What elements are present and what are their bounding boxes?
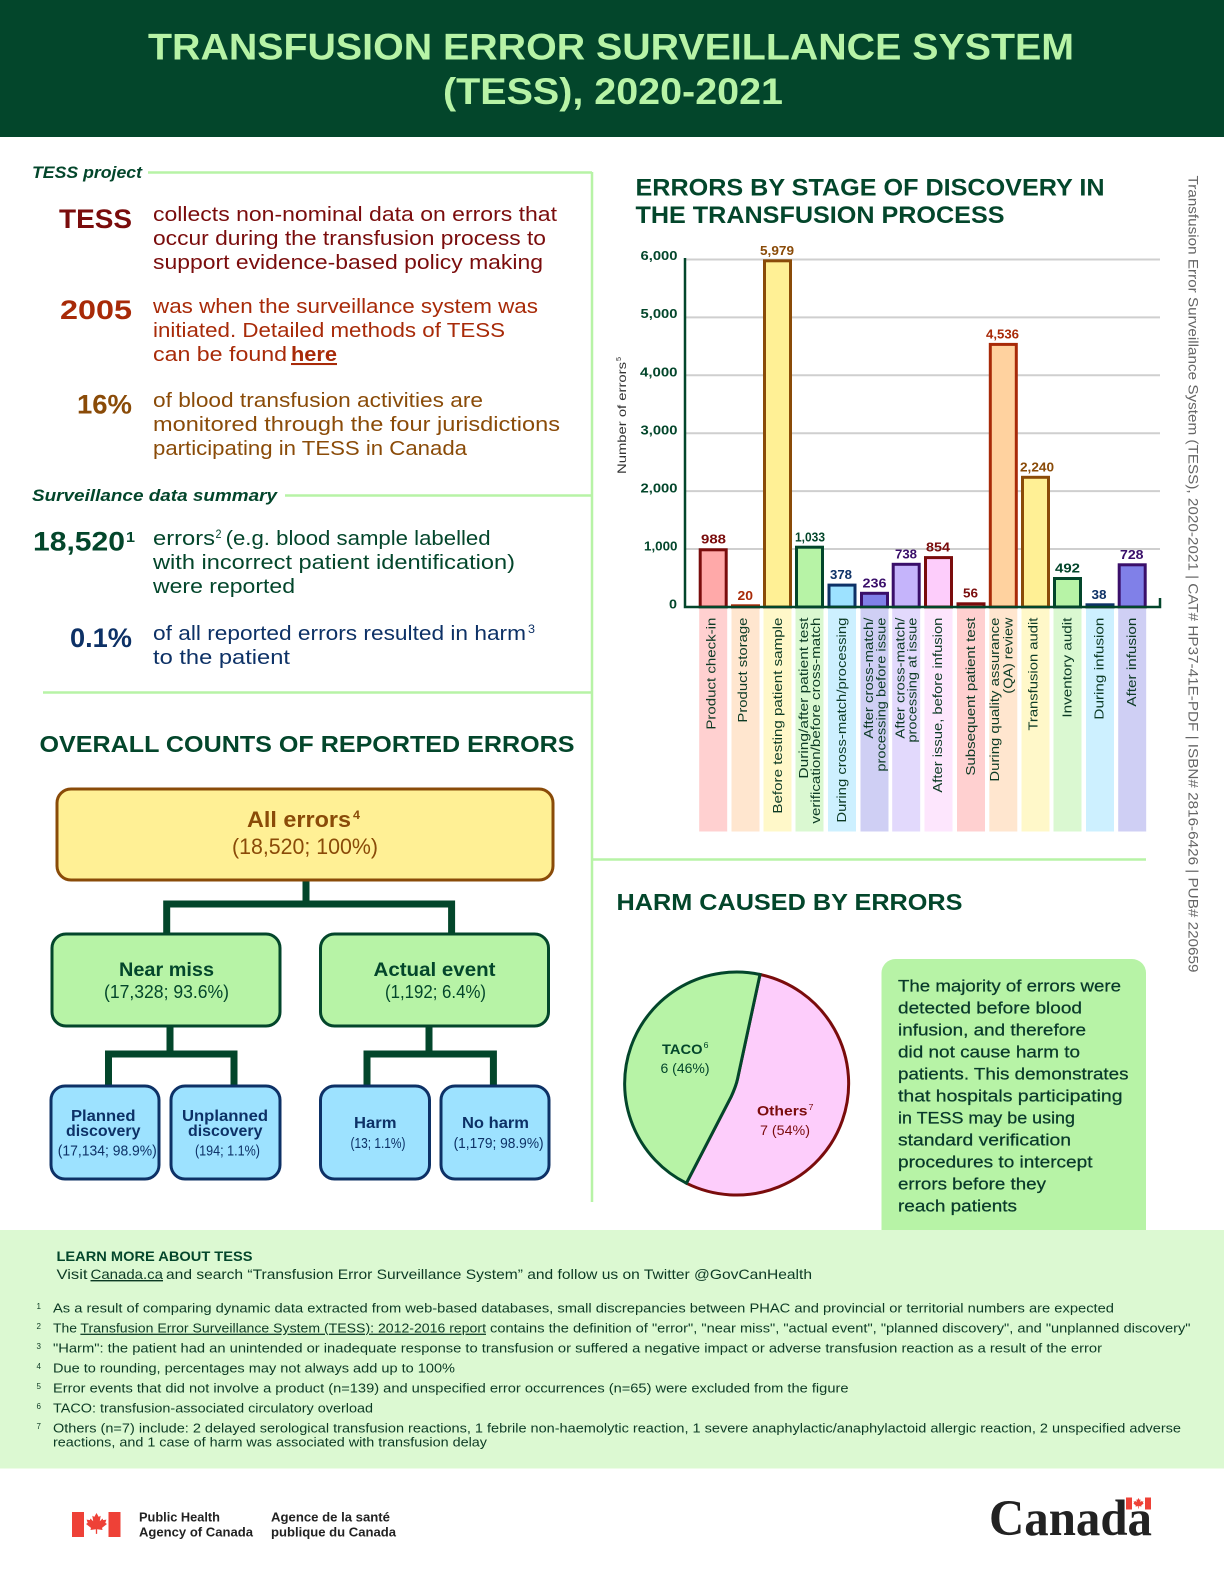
fact: 18,520 errors: (e.g. blood sample labelled: [226, 527, 491, 550]
fact: 18,520 errors: errors: [153, 527, 215, 550]
callout: majority of errors: errors before they: [898, 1174, 1047, 1194]
box: all errors: All errors: [247, 807, 351, 832]
fact: 2005: can be found: [153, 343, 287, 366]
fact: 0.1% harm: of all reported errors resulted in harm: [153, 622, 526, 645]
panel: overall counts of reported errors: [40, 731, 574, 1179]
box: planned discovery: [51, 1086, 159, 1179]
panel: errors by stage chart: [615, 174, 1160, 832]
fact: 2005: 2005: [60, 295, 132, 325]
logo: Public Health Agency of Canada: Agence de la santé: [271, 1510, 390, 1524]
callout: majority of errors: that hospitals participating: [898, 1086, 1122, 1106]
fact: 18,520 errors: 2: [216, 527, 222, 541]
box: all errors: [57, 789, 553, 880]
bar value labels: 2,240: [1020, 460, 1054, 474]
bar value labels: 854: [926, 540, 950, 554]
footnotes: 3: [36, 1342, 42, 1351]
bar value labels: 728: [1120, 548, 1144, 562]
heading: errors by stage: ERRORS BY STAGE OF DISCOVERY IN: [636, 174, 1104, 202]
bar value labels: 236: [862, 576, 887, 590]
callout: majority of errors: in TESS may be using: [898, 1108, 1075, 1128]
category labels: Before testing patient sample: [771, 618, 785, 814]
pie label: others: 7: [808, 1103, 814, 1112]
footnotes: As a result of comparing dynamic data extracted from web-based databases, small discrepancies between PHAC and provincial or territorial numbers are expected: [53, 1302, 1114, 1316]
axis title: Number of errors: [615, 362, 629, 474]
footnotes: TACO: transfusion-associated circulatory overload: [53, 1402, 373, 1416]
bar value labels: 738: [895, 548, 917, 562]
publication identifiers (vertical): Transfusion Error Surveillance System (TESS), 2020-2021 | CAT# HP37-41E-PDF | ISBN# 2816-6426 | PUB# 220659: [1186, 176, 1202, 973]
logo: Canada wordmark: Canada: [989, 1491, 1152, 1547]
box: no harm: [441, 1086, 549, 1179]
category labels: Transfusion audit: [1027, 617, 1041, 731]
learn more: LEARN MORE ABOUT TESS: [56, 1249, 252, 1264]
title banner: (TESS), 2020-2021: [443, 71, 783, 112]
category labels: During quality assurance: [988, 618, 1002, 782]
box: planned discovery: Planned: [71, 1108, 136, 1125]
footnotes: 1: [36, 1302, 42, 1311]
box: near miss: (17,328; 93.6%): [104, 982, 229, 1002]
box: actual event: (1,192; 6.4%): [385, 982, 486, 1002]
pie label: others: 7 (54%): [760, 1122, 810, 1138]
fact: TESS: [59, 203, 557, 274]
bar value labels: [701, 244, 1144, 603]
fact: 18,520 errors: 1: [126, 529, 135, 546]
box: harm: Harm: [354, 1115, 396, 1132]
footnotes: 2: [36, 1322, 42, 1331]
fact: 0.1% harm: to the patient: [153, 646, 290, 669]
box: all errors: (18,520; 100%): [232, 834, 378, 859]
footnotes: Error events that did not involve a product (n=139) and unspecified error occurrences (n=65) were excluded from the figure: [53, 1382, 849, 1396]
callout: majority of errors: did not cause harm to: [898, 1042, 1080, 1062]
box: unplanned discovery: (194; 1.1%): [195, 1144, 260, 1160]
fact: TESS: occur during the transfusion process to: [153, 227, 546, 250]
category labels: verification/before cross-match: [809, 618, 823, 824]
panel: harm caused by errors: [616, 889, 1146, 1232]
heading: errors by stage: THE TRANSFUSION PROCESS: [636, 202, 1004, 229]
fact: TESS: collects non-nominal data on errors that: [153, 203, 557, 226]
heading: harm caused: HARM CAUSED BY ERRORS: [616, 889, 962, 915]
box: harm: (13; 1.1%): [350, 1136, 406, 1152]
box: unplanned discovery: Unplanned: [182, 1108, 268, 1125]
bar value labels: 38: [1092, 588, 1107, 602]
title banner: TRANSFUSION ERROR SURVEILLANCE SYSTEM: [148, 26, 1074, 68]
category labels: After issue, before infusion: [931, 618, 945, 793]
logo: Public Health Agency of Canada: Agency of Canada: [139, 1526, 254, 1540]
fact: 2005: here: [291, 343, 337, 366]
y axis tick labels: [640, 249, 678, 612]
box: unplanned discovery: [171, 1086, 280, 1179]
y axis tick labels: 2,000: [640, 482, 678, 496]
footnotes: "Harm": the patient had an unintended or inadequate response to transfusion or suffered a negative impact or adverse transfusion reaction as a result of the error: [53, 1342, 1102, 1356]
fact: 2005: initiated. Detailed methods of TESS: [153, 319, 505, 342]
heading: TESS project: TESS project: [32, 163, 143, 182]
footnotes: The: [53, 1322, 77, 1336]
title banner: [0, 0, 1224, 137]
pie label: TACO: [660, 1041, 710, 1076]
footnotes: 7: [36, 1422, 42, 1431]
fact: 0.1% harm: [70, 622, 535, 669]
category labels: During infusion: [1092, 618, 1106, 720]
fact: 2005: was when the surveillance system was: [152, 295, 538, 318]
logo: Public Health Agency of Canada: [72, 1510, 397, 1540]
icon: wordmark flag: [1126, 1498, 1151, 1510]
fact: TESS: support evidence-based policy making: [153, 251, 543, 274]
callout: majority of errors: reach patients: [898, 1196, 1017, 1216]
pie slice: others: [686, 974, 849, 1195]
box: actual event: Actual event: [374, 960, 496, 981]
bar value labels: 1,033: [795, 530, 825, 544]
callout: majority of errors: [882, 959, 1146, 1232]
logo: Public Health Agency of Canada: publique du Canada: [271, 1526, 397, 1540]
y axis tick labels: 6,000: [640, 249, 678, 263]
category labels: Subsequent patient test: [964, 617, 978, 776]
fact: 16%: participating in TESS in Canada: [153, 437, 468, 460]
footnotes: reactions, and 1 case of harm was associated with transfusion delay: [53, 1436, 488, 1450]
box: planned discovery: discovery: [66, 1123, 141, 1140]
pie label: TACO: 6 (46%): [660, 1060, 710, 1076]
box: all errors: 4: [353, 808, 360, 822]
bar value labels: 4,536: [986, 328, 1019, 342]
footnotes: [36, 1302, 1190, 1450]
box: unplanned discovery: discovery: [188, 1123, 263, 1140]
fact: 16%: of blood transfusion activities are: [153, 389, 483, 412]
callout: majority of errors: standard verification: [898, 1130, 1071, 1150]
fact: 16%: monitored through the four jurisdictions: [153, 413, 560, 436]
box: planned discovery: (17,134; 98.9%): [58, 1144, 157, 1160]
fact: 2005: [60, 295, 538, 366]
footnotes: Others (n=7) include: 2 delayed serological transfusion reactions, 1 febrile non-haemolytic reaction, 1 severe anaphylactic/anaphylactoid allergic reaction, 2 unspecified adverse: [53, 1422, 1181, 1436]
callout: majority of errors: patients. This demonstrates: [898, 1064, 1128, 1084]
category labels: [704, 616, 1139, 824]
box: harm: [320, 1086, 430, 1179]
category labels: During/after patient test: [797, 617, 811, 779]
y axis tick labels: 5,000: [640, 307, 678, 321]
panel: surveillance data summary: [32, 486, 535, 669]
y axis tick labels: 0: [669, 598, 677, 612]
callout: majority of errors: procedures to intercept: [898, 1152, 1093, 1172]
learn more: and search “Transfusion Error Surveillance System” and follow us on Twitter @GovCanHealth: [166, 1266, 812, 1282]
bar value labels: 492: [1055, 562, 1080, 576]
category labels: After cross-match/: [893, 617, 907, 739]
category labels: Product storage: [736, 618, 750, 723]
footnotes: 4: [36, 1362, 42, 1371]
category labels: After cross-match/: [862, 617, 876, 739]
fact: 16%: 16%: [77, 390, 132, 420]
category labels: During cross-match/processing: [835, 618, 849, 823]
heading: errors by stage: [636, 174, 1104, 229]
heading: overall counts: OVERALL COUNTS OF REPORTED ERRORS: [40, 731, 574, 757]
category labels: processing at issue: [905, 618, 919, 743]
box: no harm: (1,179; 98.9%): [454, 1136, 544, 1152]
callout: majority of errors: detected before blood: [898, 998, 1082, 1018]
category labels: (QA) review: [1002, 616, 1016, 694]
learn more: Visit: [56, 1266, 88, 1282]
pie label: others: [757, 1102, 814, 1138]
fact: TESS: TESS: [59, 204, 132, 234]
category labels: Inventory audit: [1060, 617, 1074, 718]
box: actual event: [320, 934, 548, 1026]
y axis tick labels: 3,000: [640, 424, 678, 438]
footnotes: Transfusion Error Surveillance System (TESS): 2012-2016 report: [80, 1322, 487, 1336]
pie slice: TACO: [625, 972, 760, 1183]
logo: Public Health Agency of Canada: Public Health: [139, 1510, 220, 1524]
fact: 0.1% harm: 3: [528, 622, 535, 636]
axes: [685, 258, 1160, 607]
heading: surveillance data summary: Surveillance data summary: [32, 486, 279, 505]
box: near miss: Near miss: [119, 960, 214, 981]
bars: [700, 261, 1145, 607]
pie label: TACO: 6: [704, 1041, 709, 1050]
box: no harm: No harm: [462, 1115, 529, 1132]
category labels: After infusion: [1125, 618, 1139, 707]
footnotes: contains the definition of "error", "near miss", "actual event", "planned discovery", and "unplanned discovery": [490, 1322, 1190, 1336]
pie label: TACO: TACO: [662, 1041, 703, 1057]
callout: majority of errors: infusion, and therefore: [898, 1020, 1086, 1040]
panel: TESS project: [32, 163, 560, 460]
fact: 0.1% harm: 0.1%: [70, 623, 132, 653]
learn more: Canada.ca: [90, 1266, 163, 1282]
bar value labels: 5,979: [760, 244, 794, 258]
bar value labels: 56: [963, 586, 978, 600]
pie chart: [625, 972, 849, 1195]
axis title: 5: [616, 357, 623, 361]
footnotes: 5: [36, 1382, 42, 1391]
pie label: others: Others: [757, 1102, 808, 1118]
fact: 18,520 errors: [33, 526, 515, 598]
bar value labels: 20: [738, 589, 753, 603]
fact: 18,520 errors: were reported: [152, 575, 295, 598]
footer: learn more and footnotes: [0, 1230, 1224, 1468]
footnotes: 6: [36, 1402, 42, 1411]
y axis tick labels: 4,000: [640, 366, 678, 380]
fact: 16%: [77, 389, 560, 460]
fact: 18,520 errors: 18,520: [33, 526, 125, 556]
category label panels: [699, 609, 1146, 832]
learn more: [56, 1249, 812, 1282]
bar value labels: 988: [701, 532, 726, 546]
y axis tick labels: 1,000: [644, 540, 678, 554]
icon: Canadian flag: [72, 1512, 120, 1537]
category labels: Product check-in: [704, 618, 718, 730]
bar value labels: 378: [830, 568, 852, 582]
fact: 18,520 errors: with incorrect patient identification): [152, 551, 515, 574]
category labels: processing before issue: [874, 618, 888, 772]
box: near miss: [52, 934, 280, 1026]
footnotes: Due to rounding, percentages may not always add up to 100%: [53, 1362, 455, 1376]
tree connectors: [108, 881, 493, 1086]
callout: majority of errors: The majority of errors were: [898, 976, 1121, 996]
